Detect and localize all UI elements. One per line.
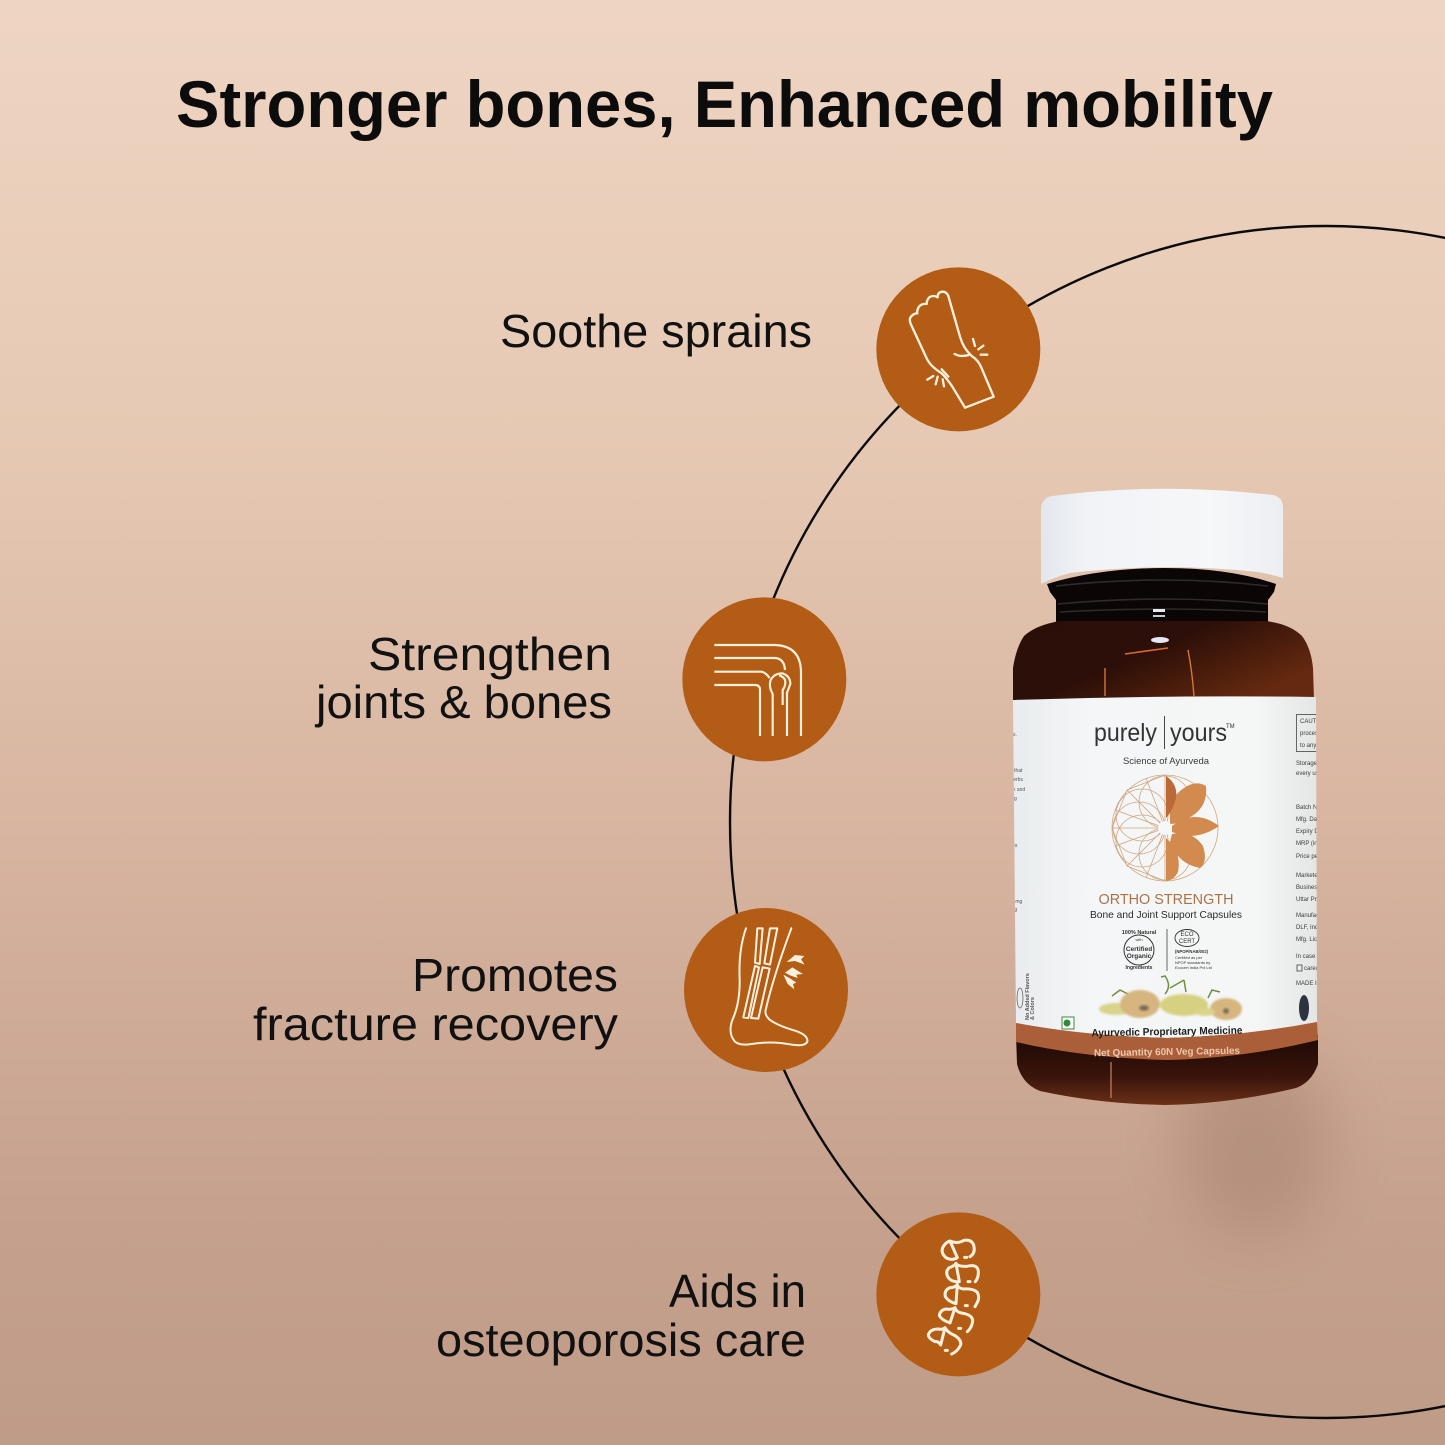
- right label panel: Storage: Store: [1296, 761, 1335, 767]
- brand logo: TM: [1226, 724, 1235, 730]
- right label panel: Batch No:: [1296, 805, 1323, 811]
- left label panel: [1013, 733, 1034, 1020]
- label: [253, 949, 618, 1050]
- left label panel: 110 mg: [1006, 899, 1023, 905]
- organic seal: 100% Natural: [1122, 930, 1157, 936]
- right label panel: processing: [1300, 731, 1329, 737]
- left label panel: ents.: [1006, 732, 1017, 738]
- brown band: [1016, 1022, 1318, 1060]
- right label panel: Expiry Date:: [1296, 829, 1329, 835]
- benefit: soothe sprains: [500, 267, 1040, 431]
- veg mark: [1062, 1017, 1074, 1029]
- right label panel: Manufactu: [1296, 913, 1324, 919]
- right label panel: Marketed: [1296, 873, 1321, 879]
- organic seal: [1122, 930, 1157, 971]
- product descriptor: Bone and Joint Support Capsules: [1090, 909, 1242, 921]
- icon: spine: [876, 1212, 1040, 1376]
- benefit: osteoporosis care: [436, 1212, 1040, 1376]
- bottle shadow: [1180, 1045, 1330, 1235]
- ecocert mark: Ecocert India Pvt Ltd: [1175, 965, 1212, 970]
- brand logo: yours: [1170, 719, 1227, 747]
- ecocert mark: NPOP standards by: [1175, 960, 1210, 965]
- title: Stronger bones, Enhanced mobility: [176, 67, 1273, 141]
- icon: joint: [682, 597, 846, 761]
- left label panel: No Added Flavors: [1025, 973, 1031, 1020]
- right label panel: MRP (incl. of: [1296, 841, 1331, 847]
- benefit: fracture recovery: [253, 908, 848, 1072]
- right label panel: CAUTION: [1300, 719, 1327, 725]
- mandala: [1112, 775, 1219, 881]
- organic seal: with: [1135, 937, 1143, 942]
- label: Soothe sprains: [500, 305, 812, 357]
- bottle neck: [1047, 568, 1276, 622]
- organic seal: Organic: [1127, 953, 1152, 960]
- label: joints & bones: [314, 676, 612, 728]
- right label panel: In case of: [1296, 954, 1322, 960]
- ecocert mark: [1175, 930, 1212, 970]
- left label panel: nts that: [1006, 768, 1023, 774]
- herbs illustration: [1099, 976, 1242, 1020]
- right label panel: DLF, Industrial: [1296, 925, 1334, 931]
- brand logo: [1094, 716, 1235, 749]
- brand logo: purely: [1094, 719, 1157, 747]
- left label panel: rt herbs: [1006, 777, 1023, 783]
- label: osteoporosis care: [436, 1314, 806, 1366]
- ecocert mark: (NPOP/NAB/002): [1175, 949, 1209, 954]
- connecting arc: [730, 226, 1445, 1418]
- ecocert mark: CERT: [1179, 939, 1195, 945]
- left label panel: 8 mg: [1006, 907, 1017, 913]
- left label panel: ating: [1006, 796, 1017, 802]
- icon: fractured leg: [684, 908, 848, 1072]
- organic seal: Ingredients: [1126, 965, 1153, 971]
- label: [1013, 696, 1317, 1038]
- right label panel: every use.: [1296, 771, 1324, 777]
- right label panel: to any of the: [1300, 743, 1334, 749]
- right label panel: MADE IN INDIA: [1296, 981, 1339, 987]
- ecocert mark: ECO: [1180, 932, 1194, 938]
- organic seal: Certified: [1126, 946, 1152, 953]
- left label panel: & Colors: [1030, 997, 1036, 1020]
- label: Promotes: [412, 949, 618, 1001]
- seal divider: [1166, 929, 1168, 971]
- cap: [1041, 489, 1283, 584]
- icon: wrist sprain: [876, 267, 1040, 431]
- product bottle: [1006, 489, 1339, 1105]
- left label panel: sosis: [1006, 843, 1018, 849]
- ecocert mark: Certified as per: [1175, 955, 1203, 960]
- label: Strengthen: [368, 628, 612, 680]
- label: Aids in: [669, 1265, 806, 1317]
- right label panel: Price per caps: [1296, 854, 1334, 860]
- tagline: Science of Ayurveda: [1123, 756, 1210, 767]
- left label panel: gain and: [1006, 787, 1025, 793]
- glass base: [1016, 1035, 1318, 1105]
- label: [314, 628, 612, 728]
- classification: Ayurvedic Proprietary Medicine: [1091, 1025, 1243, 1039]
- benefit: strengthen joints and bones: [314, 597, 846, 761]
- right label panel: Mfg. Lic No: [1296, 937, 1327, 943]
- right label panel: Business Park: [1296, 885, 1335, 891]
- right label panel: care@: [1304, 966, 1322, 972]
- net quantity: Net Quantity 60N Veg Capsules: [1094, 1046, 1240, 1059]
- label: fracture recovery: [253, 998, 618, 1050]
- right label panel: Uttar Pradesh: [1296, 897, 1333, 903]
- glass shoulder: [1013, 621, 1314, 700]
- label: [436, 1265, 806, 1366]
- right label panel: Mfg. Date:: [1296, 817, 1324, 823]
- right label panel: [1296, 714, 1317, 1021]
- product name: ORTHO STRENGTH: [1098, 892, 1234, 908]
